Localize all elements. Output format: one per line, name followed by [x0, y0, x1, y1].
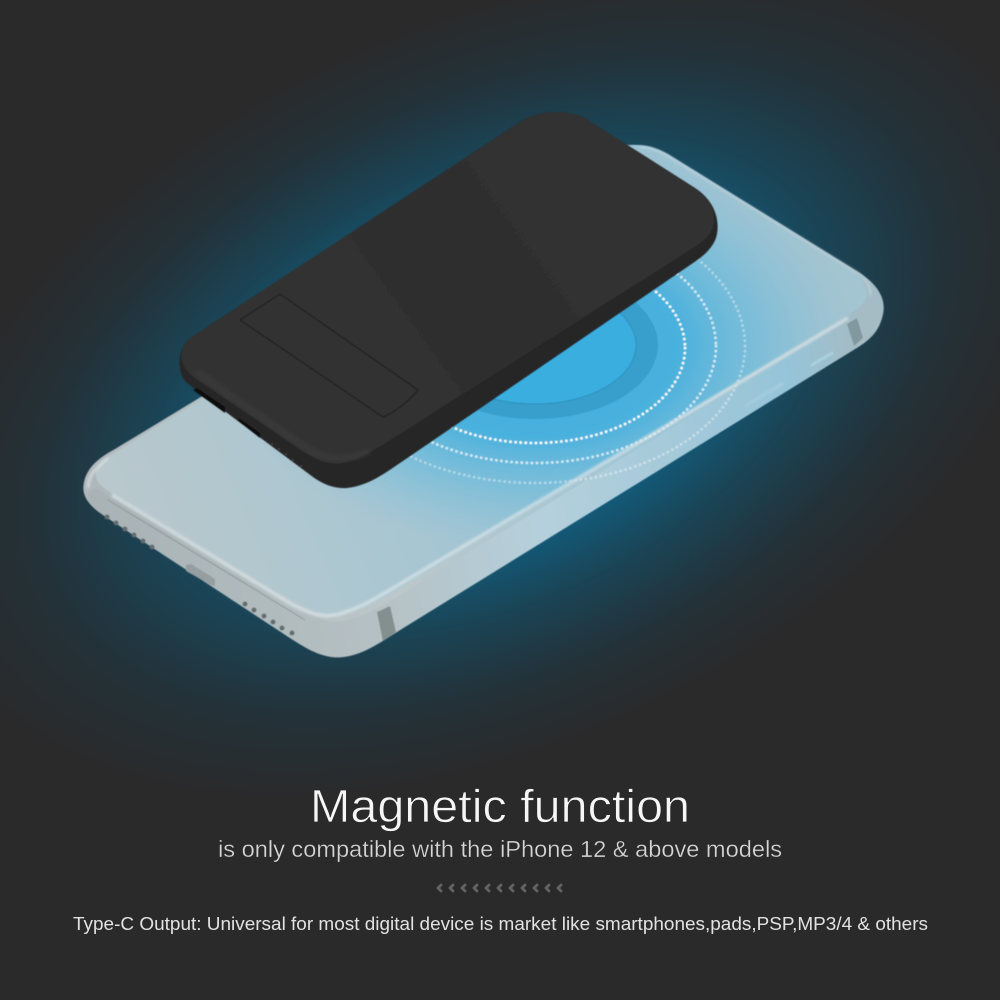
speaker holes right	[242, 602, 294, 636]
indicator dots	[271, 443, 302, 467]
dotted charging rings	[325, 209, 745, 483]
antenna band right	[847, 318, 863, 346]
phone side shading	[88, 300, 883, 657]
power bank body	[180, 112, 718, 488]
antenna bands	[377, 318, 863, 642]
charging port	[186, 564, 215, 586]
charging coil centre	[495, 314, 636, 404]
subtitle: is only compatible with the iPhone 12 & above models	[218, 836, 782, 862]
wireless charging glow	[352, 205, 820, 526]
USB port one	[193, 388, 225, 413]
phone	[80, 130, 884, 657]
volume button two	[747, 384, 782, 405]
power bank	[180, 112, 718, 488]
USB port two	[237, 419, 260, 438]
power bank top face	[182, 112, 714, 463]
speaker holes left	[104, 514, 154, 550]
description: Type-C Output: Universal for most digital device is market like smartphones,pads,PSP,MP3/4 & others	[73, 913, 928, 934]
soft edge light	[196, 372, 370, 458]
charging coil band	[478, 302, 658, 419]
glass edge upper right	[640, 147, 870, 296]
left corner highlights	[88, 458, 108, 488]
groove line	[108, 500, 305, 620]
antenna band bottom	[377, 606, 396, 642]
screen edge highlight	[112, 318, 848, 616]
phone body	[83, 145, 884, 657]
pad outline	[240, 294, 418, 417]
title: Magnetic function	[310, 780, 690, 832]
chevron divider	[438, 885, 561, 891]
volume button one	[812, 353, 832, 365]
phone screen	[96, 205, 866, 613]
